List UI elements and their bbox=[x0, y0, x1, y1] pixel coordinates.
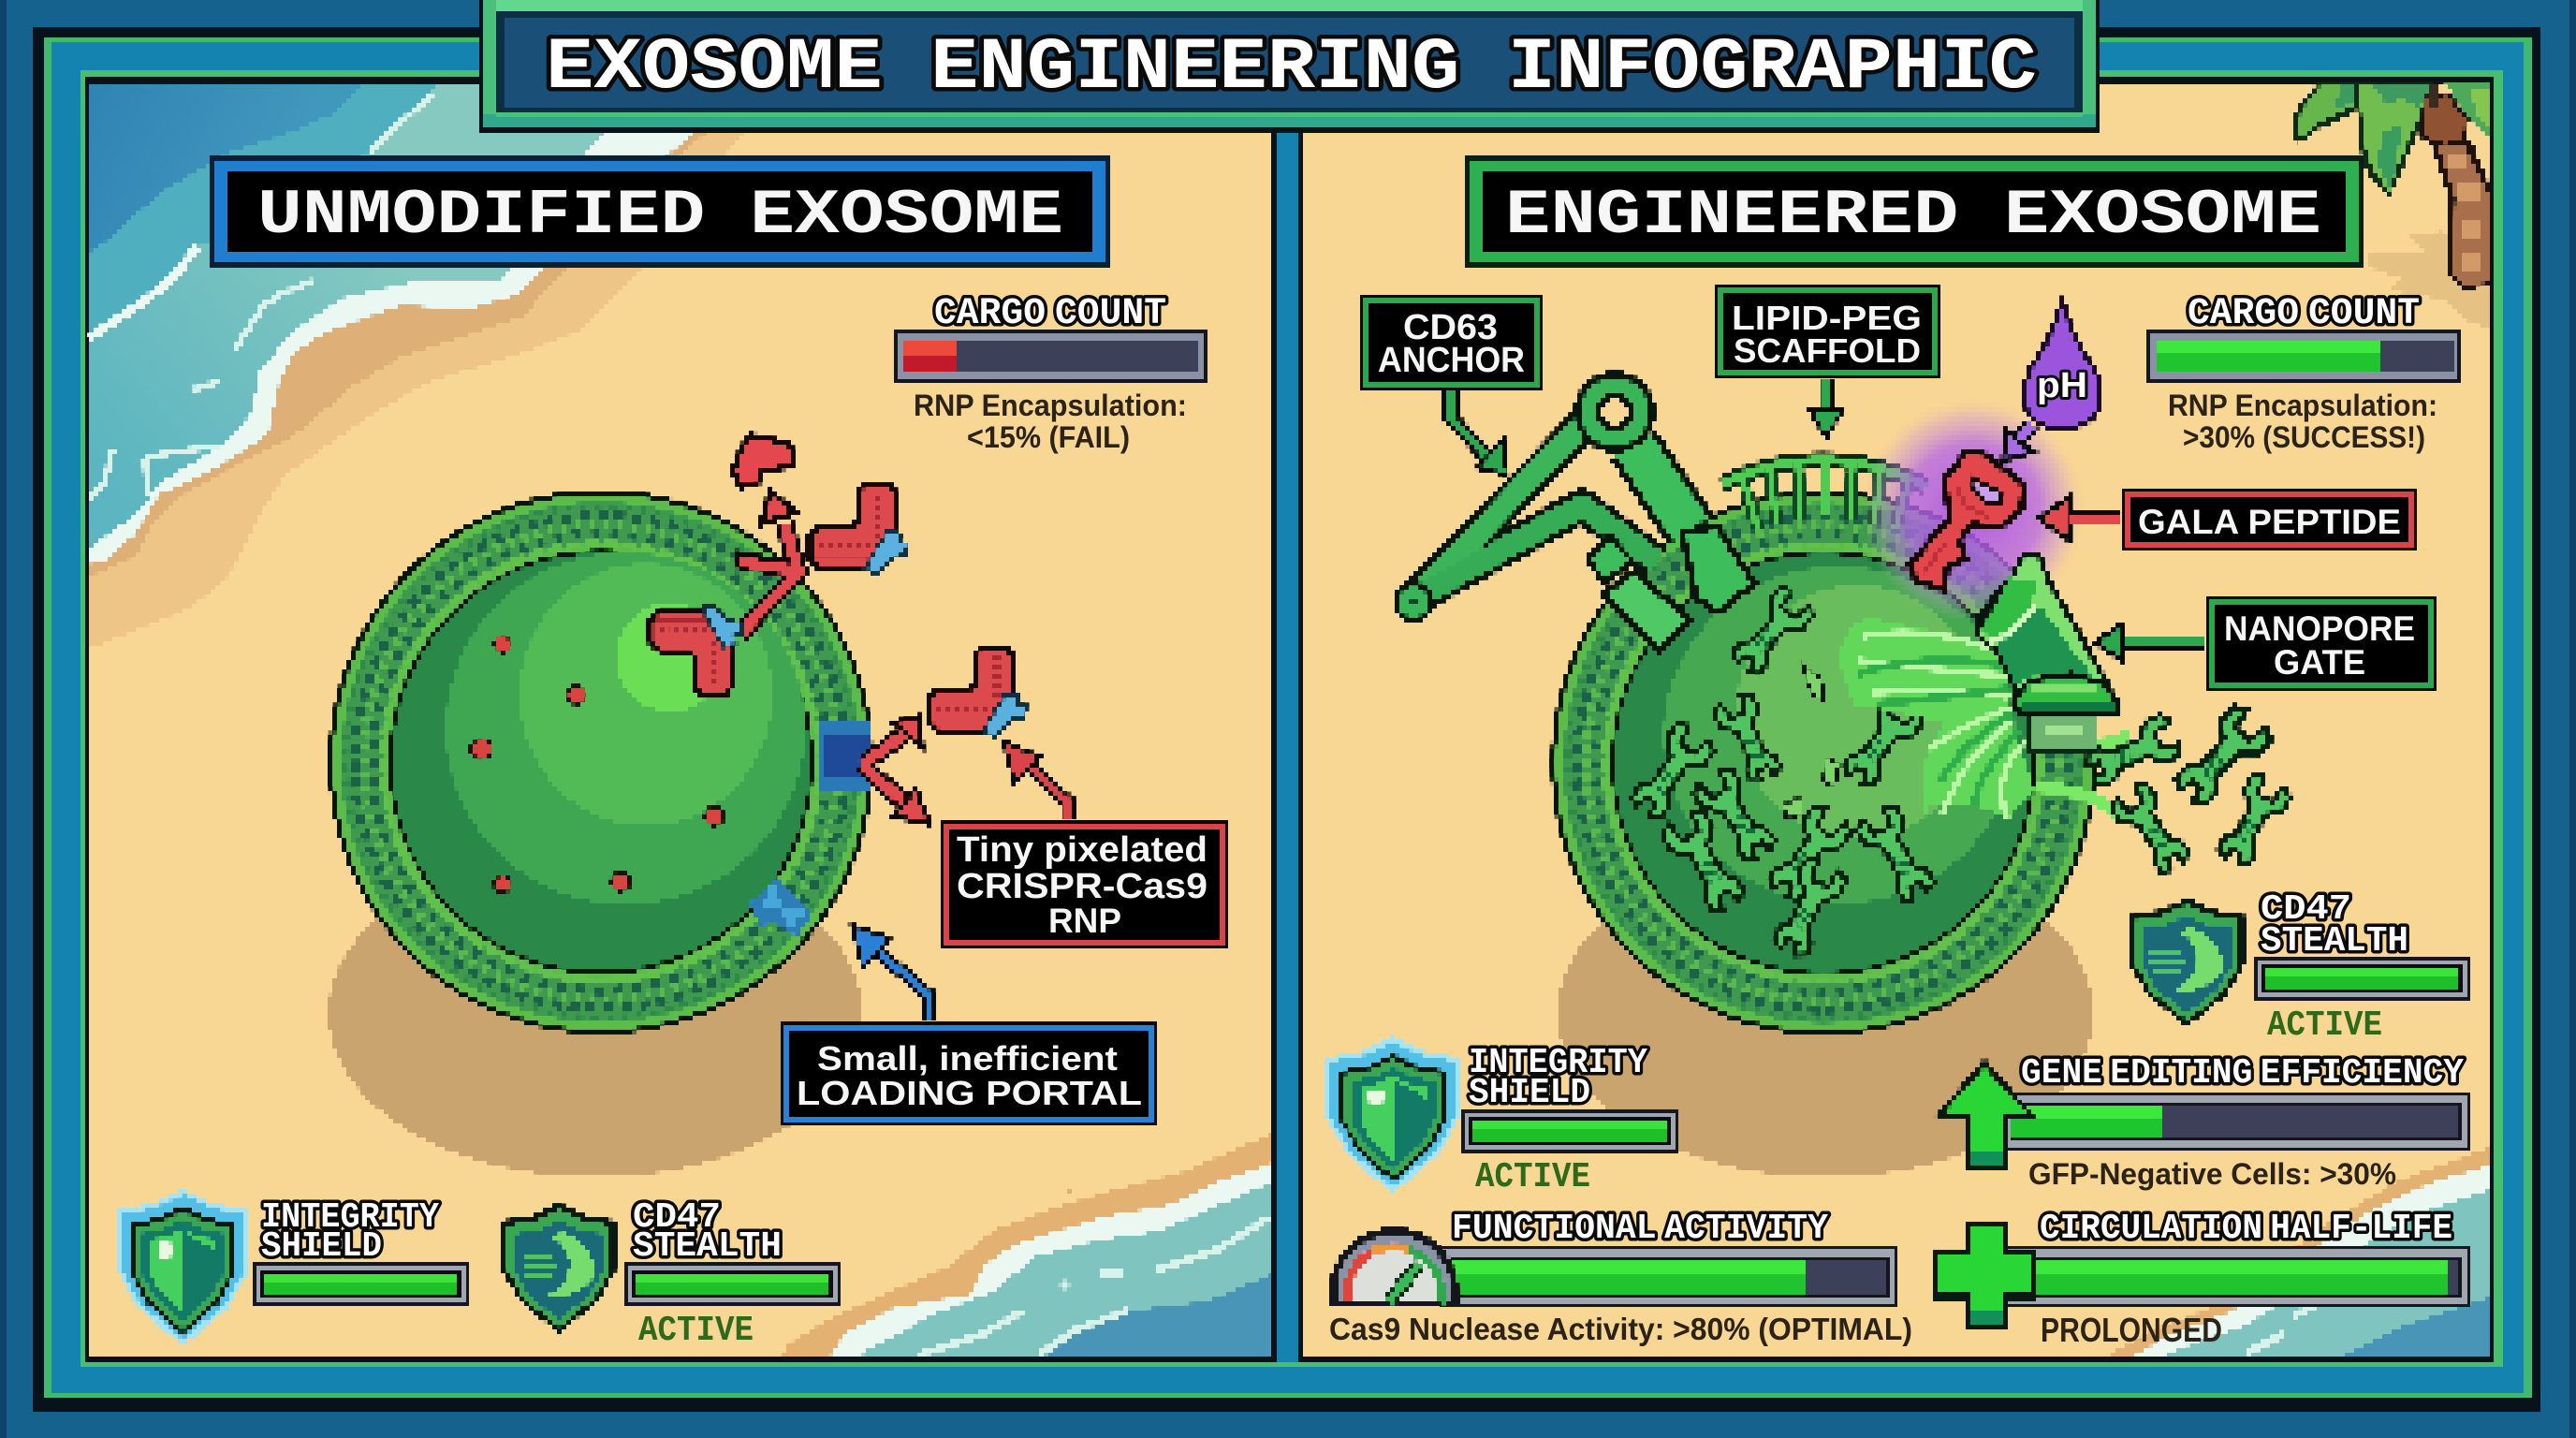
icon: shield bbox=[117, 1189, 249, 1346]
title text: EXOSOME ENGINEERING INFOGRAPHIC bbox=[546, 27, 2037, 110]
integrity shield: engineered: ACTIVE bbox=[1475, 1157, 1590, 1197]
integrity shield: unmodified bbox=[117, 1189, 469, 1346]
activity bar bbox=[1440, 1246, 1897, 1307]
cargo count: unmodified: CARGO COUNT bbox=[934, 293, 1166, 335]
gate cap bbox=[2012, 674, 2117, 750]
status bar bbox=[2254, 957, 2470, 1001]
arrow: pH to key bbox=[2003, 424, 2033, 461]
CD47 stealth: unmodified bbox=[502, 1197, 841, 1351]
ground shadow bbox=[329, 849, 862, 1177]
wrench cargo inside bbox=[1625, 583, 1940, 961]
half-life bar bbox=[2002, 1246, 2470, 1307]
cargo bar bbox=[2146, 330, 2461, 383]
callout arrow: RNP label bbox=[1003, 741, 1068, 820]
CD47 stealth: unmodified: STEALTH bbox=[633, 1226, 782, 1267]
callout arrow: loading portal bbox=[852, 925, 929, 1021]
heading: engineered exosome: ENGINEERED EXOSOME bbox=[1505, 180, 2321, 252]
callout: nanopore gate: NANOPORE bbox=[2224, 609, 2415, 648]
membrane bbox=[329, 490, 873, 1034]
icon: gauge bbox=[1329, 1227, 1458, 1306]
panel: unmodified exosome beach background bbox=[87, 82, 1273, 1357]
circulation half-life: CIRCULATION HALF-LIFE bbox=[2040, 1209, 2452, 1249]
heading: engineered exosome bbox=[1465, 155, 2364, 268]
panel: engineered exosome beach background bbox=[1303, 81, 2495, 1357]
wrench cargo released bbox=[2081, 701, 2292, 878]
CD47 stealth: unmodified: CD47 bbox=[633, 1197, 721, 1238]
status bar bbox=[1461, 1109, 1678, 1153]
callout arrow: nanopore gate bbox=[2095, 624, 2206, 661]
RNP cargo bbox=[651, 605, 743, 695]
callout: GALA peptide: GALA PEPTIDE bbox=[2138, 503, 2401, 541]
lumen bbox=[1615, 554, 2032, 972]
callout: CD63 anchor: ANCHOR bbox=[1378, 341, 1525, 380]
bottom shore bbox=[782, 1133, 1273, 1357]
callout: CRISPR-Cas9 RNP: CRISPR-Cas9 bbox=[957, 867, 1208, 906]
cargo count: engineered: RNP Encapsulation: bbox=[2168, 389, 2437, 422]
unmodified exosome bbox=[329, 435, 1026, 1177]
functional activity: FUNCTIONAL ACTIVITY bbox=[1452, 1209, 1828, 1249]
integrity shield: engineered bbox=[1326, 1036, 1678, 1197]
palm tree bbox=[2291, 81, 2495, 292]
callout: CD63 anchor: CD63 bbox=[1403, 308, 1498, 347]
lipid-PEG scaffold bbox=[1722, 457, 1926, 529]
status bar bbox=[253, 1262, 469, 1306]
gene editing efficiency: GFP-Negative Cells: >30% bbox=[2028, 1157, 2396, 1191]
bottom shore bbox=[2106, 1147, 2491, 1357]
callout: nanopore gate bbox=[2206, 596, 2437, 691]
callout: CRISPR-Cas9 RNP bbox=[941, 820, 1228, 948]
icon: shield bbox=[1326, 1036, 1459, 1194]
icon: pH drop bbox=[2025, 298, 2100, 429]
water bbox=[87, 82, 739, 565]
functional activity: Cas9 Nuclease Activity: >80% (OPTIMAL) bbox=[1329, 1312, 1912, 1346]
CD47 stealth: engineered: ACTIVE bbox=[2267, 1005, 2382, 1046]
palm tree shadow bbox=[2368, 231, 2491, 330]
wet sand bbox=[89, 133, 744, 646]
gene editing efficiency: GENE EDITING EFFICIENCY bbox=[2021, 1053, 2464, 1093]
status bar bbox=[624, 1262, 841, 1306]
functional activity bbox=[1329, 1209, 1912, 1346]
CD47 stealth: engineered: CD47 bbox=[2261, 889, 2351, 930]
callout: GALA peptide bbox=[2122, 489, 2417, 550]
ground shadow bbox=[1558, 849, 2093, 1177]
lumen bbox=[392, 552, 810, 971]
callout: CRISPR-Cas9 RNP: RNP bbox=[1048, 902, 1121, 940]
gene editing efficiency bbox=[1935, 1053, 2470, 1191]
callout: CRISPR-Cas9 RNP: Tiny pixelated bbox=[957, 830, 1208, 870]
CD47 stealth: engineered bbox=[2130, 889, 2470, 1046]
cargo count: unmodified: <15% (FAIL) bbox=[967, 420, 1130, 454]
callout: loading portal bbox=[781, 1021, 1157, 1125]
icon: up arrow bbox=[1935, 1058, 2035, 1170]
integrity shield: engineered: INTEGRITY bbox=[1469, 1043, 1647, 1083]
icon: plus bbox=[1932, 1222, 2035, 1331]
callout: lipid-PEG scaffold: LIPID-PEG bbox=[1732, 299, 1922, 337]
cargo count: unmodified bbox=[894, 293, 1208, 454]
GALA peptide key with purple glow bbox=[1863, 400, 2084, 621]
fragments bbox=[1783, 665, 1839, 819]
cargo count: engineered: >30% (SUCCESS!) bbox=[2183, 420, 2425, 454]
efficiency bar bbox=[2002, 1093, 2470, 1151]
callout: CD63 anchor bbox=[1360, 295, 1543, 390]
membrane bbox=[1551, 491, 2096, 1035]
cargo bar bbox=[894, 330, 1208, 383]
loading portal bbox=[749, 719, 871, 936]
CD63 anchor arm bbox=[1396, 374, 1754, 651]
funnel bbox=[1973, 552, 2117, 704]
red cargo dots bbox=[471, 636, 724, 892]
icon: stealth shield bbox=[2130, 898, 2245, 1026]
icon: stealth shield bbox=[502, 1203, 616, 1333]
integrity shield: unmodified: INTEGRITY bbox=[261, 1197, 439, 1238]
title banner bbox=[479, 0, 2100, 133]
circulation half-life: PROLONGED bbox=[2041, 1311, 2222, 1349]
foam bbox=[89, 133, 693, 565]
callout: lipid-PEG scaffold: SCAFFOLD bbox=[1734, 331, 1921, 370]
cargo count: engineered bbox=[2146, 293, 2461, 454]
callout: nanopore gate: GATE bbox=[2274, 643, 2365, 682]
CD47 stealth: engineered: STEALTH bbox=[2261, 921, 2408, 961]
callout arrow: lipid-PEG scaffold bbox=[1809, 378, 1843, 438]
callout: loading portal: LOADING PORTAL bbox=[797, 1074, 1142, 1112]
callout: lipid-PEG scaffold bbox=[1715, 285, 1940, 378]
cargo blocked arrows bbox=[735, 492, 929, 824]
callout arrow: GALA peptide bbox=[2039, 498, 2122, 539]
callout: loading portal: Small, inefficient bbox=[817, 1039, 1118, 1078]
cargo count: engineered: CARGO COUNT bbox=[2188, 293, 2420, 335]
icon: pH drop: pH bbox=[2037, 366, 2087, 405]
light rays bbox=[1837, 618, 2130, 830]
heading: unmodified exosome bbox=[210, 155, 1110, 268]
callout arrow: CD63 anchor bbox=[1451, 390, 1507, 475]
engineered exosome bbox=[1551, 491, 2096, 1177]
CD47 stealth: unmodified: ACTIVE bbox=[638, 1311, 754, 1351]
integrity shield: unmodified: SHIELD bbox=[261, 1226, 382, 1267]
center divider bbox=[1271, 133, 1303, 1362]
nanopore gate with light rays bbox=[1837, 552, 2130, 830]
heading: unmodified exosome: UNMODIFIED EXOSOME bbox=[257, 180, 1063, 252]
integrity shield: engineered: SHIELD bbox=[1469, 1073, 1590, 1113]
cargo count: unmodified: RNP Encapsulation: bbox=[914, 389, 1187, 422]
circulation half-life bbox=[1932, 1209, 2470, 1349]
